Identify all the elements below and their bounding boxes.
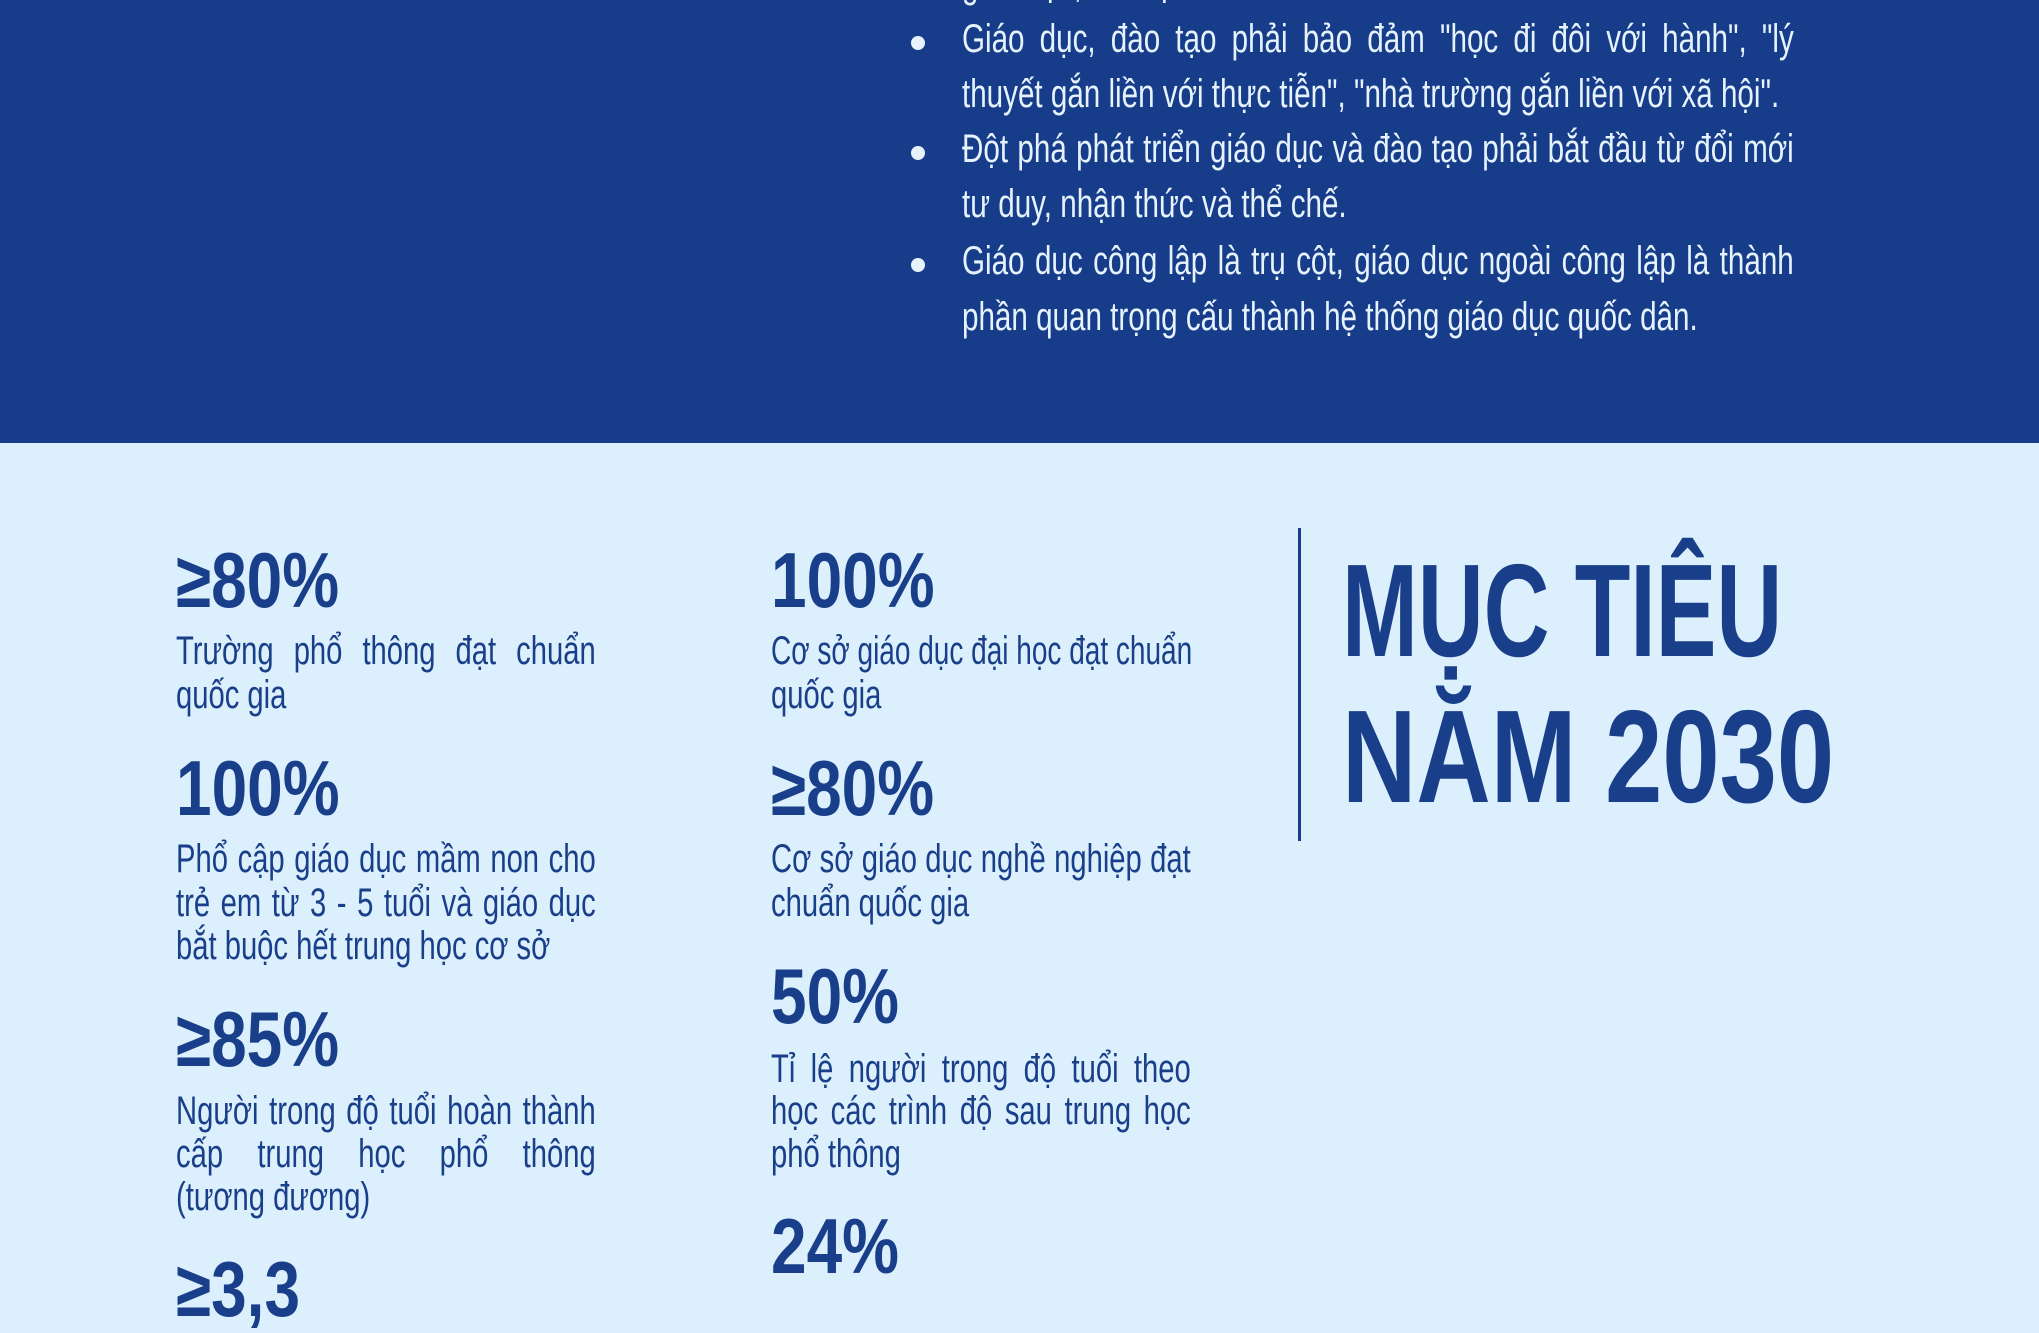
column 2 stats xyxy=(771,536,1192,1290)
text: bullet 1 xyxy=(962,17,1794,116)
stat: ≥80% schools: ≥80% xyxy=(176,536,339,624)
text: bullet 3: phần quan trọng cấu thành hệ thống giáo dục quốc dân. xyxy=(962,295,1698,339)
column 1 stats: bắt buộc hết trung học cơ sở xyxy=(176,924,550,968)
stat: 50% post-secondary: phổ thông xyxy=(771,1132,901,1176)
stat: ≥85% upper secondary xyxy=(176,995,596,1219)
stat: 100% preschool: Phổ cập giáo dục mầm non cho xyxy=(176,837,596,881)
panel: principles (blue header) xyxy=(0,0,2039,443)
stat: ≥80% vocational: Cơ sở giáo dục nghề nghiệp đạt xyxy=(771,837,1191,881)
bullet 3 xyxy=(911,258,925,272)
stat: ≥80% vocational: chuẩn quốc gia xyxy=(771,881,969,925)
text: bullet 2: tư duy, nhận thức và thể chế. xyxy=(962,182,1347,226)
stat: 50% post-secondary: Tỉ lệ người trong độ tuổi theo xyxy=(771,1047,1191,1091)
stat: 100% universities: Cơ sở giáo dục đại học đạt chuẩn xyxy=(771,629,1192,673)
stat: ≥85% upper secondary: cấp trung học phổ thông xyxy=(176,1132,596,1176)
stat: ≥80% schools: quốc gia xyxy=(176,673,286,717)
stat: ≥80% schools xyxy=(176,536,596,717)
text: bullet 1: Giáo dục, đào tạo phải bảo đảm "học đi đôi với hành", "lý xyxy=(962,17,1794,61)
stat: cut-off: ≥3,3 xyxy=(176,1245,300,1333)
text: bullet 3: Giáo dục công lập là trụ cột, giáo dục ngoài công lập là thành xyxy=(962,239,1794,283)
stat: 100% preschool xyxy=(176,744,596,968)
stat: 100% universities: 100% xyxy=(771,536,935,624)
stat: ≥80% schools: Trường phổ thông đạt chuẩn xyxy=(176,629,596,673)
title: Mục tiêu năm 2030: MỤC TIÊU xyxy=(1342,537,1782,684)
stat: 100% preschool: 100% xyxy=(176,744,340,832)
text: bullet 2 xyxy=(962,127,1794,226)
stat: ≥85% upper secondary: Người trong độ tuổi hoàn thành xyxy=(176,1089,596,1133)
stat: ≥85% upper secondary: ≥85% xyxy=(176,995,339,1083)
stat: ≥80% vocational: ≥80% xyxy=(771,744,934,832)
text: bullet 1: thuyết gắn liền với thực tiễn", "nhà trường gắn liền với xã hội". xyxy=(962,72,1779,116)
stat: ≥80% vocational xyxy=(771,744,1191,925)
title: Mục tiêu năm 2030 xyxy=(1342,537,1834,830)
column 1 stats xyxy=(176,536,596,1333)
stat: 50% post-secondary xyxy=(771,952,1191,1176)
divider line xyxy=(1298,528,1301,841)
title: Mục tiêu năm 2030: NĂM 2030 xyxy=(1342,683,1834,830)
stat: 100% universities: quốc gia xyxy=(771,673,881,717)
stat: 100% universities xyxy=(771,536,1192,717)
stat: ≥85% upper secondary: (tương đương) xyxy=(176,1175,370,1219)
bullet 2 xyxy=(911,146,925,160)
stat: 24%: 24% xyxy=(771,1202,899,1290)
text: bullet 2: Đột phá phát triển giáo dục và đào tạo phải bắt đầu từ đổi mới xyxy=(962,127,1794,171)
text: bullet 3 xyxy=(962,239,1794,339)
stat: 50% post-secondary: 50% xyxy=(771,952,899,1040)
bullet 1 xyxy=(911,36,925,50)
stat: 50% post-secondary: học các trình độ sau trung học xyxy=(771,1089,1191,1133)
stat: 100% preschool: trẻ em từ 3 - 5 tuổi và giáo dục xyxy=(176,881,596,925)
